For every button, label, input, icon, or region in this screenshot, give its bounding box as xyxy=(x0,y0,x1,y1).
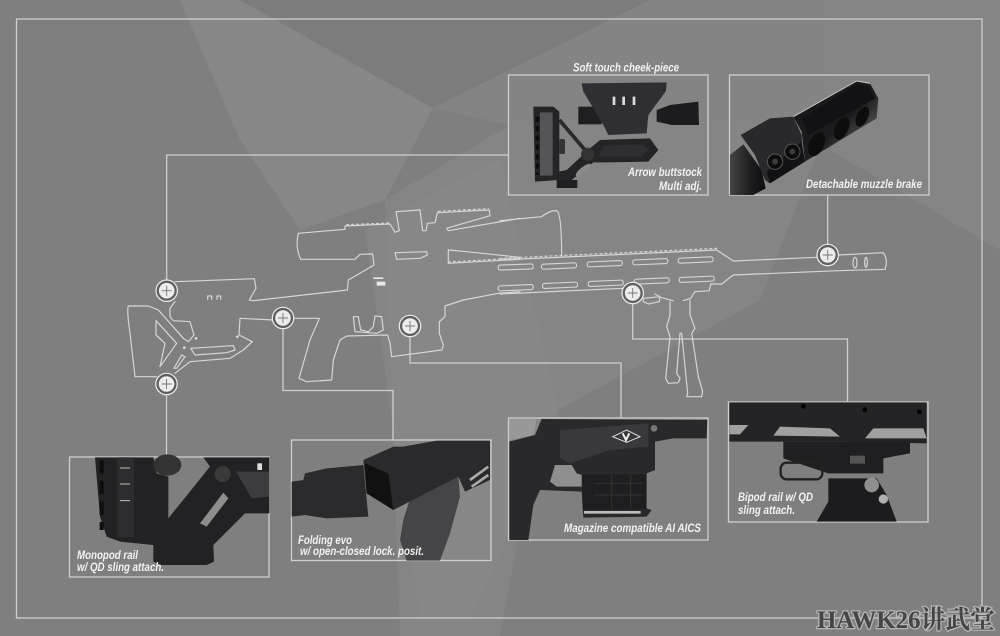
photo: folding stock xyxy=(292,441,490,561)
handguard slots xyxy=(498,257,714,291)
caption: sling attach: w/ QD sling attach. xyxy=(77,562,164,574)
watermark: HAWK26讲武堂 xyxy=(817,606,995,634)
marker: magazine xyxy=(399,315,421,337)
target markers xyxy=(156,244,838,395)
caption: magazine: Magazine compatible AI AICS xyxy=(564,523,701,535)
caption: lock position: w/ open-closed lock. posit. xyxy=(300,546,424,558)
rifle outline xyxy=(128,209,886,397)
marker: monopod rail xyxy=(156,373,177,395)
panel: monopod rail xyxy=(70,454,269,577)
photo: monopod rail xyxy=(95,454,269,565)
marker: bipod rail xyxy=(622,282,643,304)
panel: bipod rail xyxy=(728,402,928,522)
marker: folding stock xyxy=(272,307,294,329)
marker: muzzle brake xyxy=(817,244,838,266)
caption: folding evo: Folding evo xyxy=(298,535,352,547)
caption: buttstock: Arrow buttstock xyxy=(627,167,703,179)
photo: muzzle brake xyxy=(730,81,878,195)
panel: muzzle brake xyxy=(730,75,929,195)
panel: folding stock xyxy=(292,440,491,561)
photo: buttstock xyxy=(533,82,699,188)
panel: magazine xyxy=(508,418,708,540)
photo: magazine xyxy=(509,419,707,540)
caption: multi adj: Multi adj. xyxy=(659,181,702,193)
caption: muzzle brake: Detachable muzzle brake xyxy=(806,179,923,191)
panel: buttstock xyxy=(508,62,708,195)
connector lines xyxy=(166,155,848,457)
caption: sling attach: sling attach. xyxy=(738,505,795,517)
caption: monopod rail: Monopod rail xyxy=(77,550,139,562)
photo: bipod rail xyxy=(729,402,927,522)
caption: bipod rail: Bipod rail w/ QD xyxy=(738,492,813,504)
marker: buttstock xyxy=(156,280,177,301)
caption: cheek-piece: Soft touch cheek-piece xyxy=(573,62,680,74)
